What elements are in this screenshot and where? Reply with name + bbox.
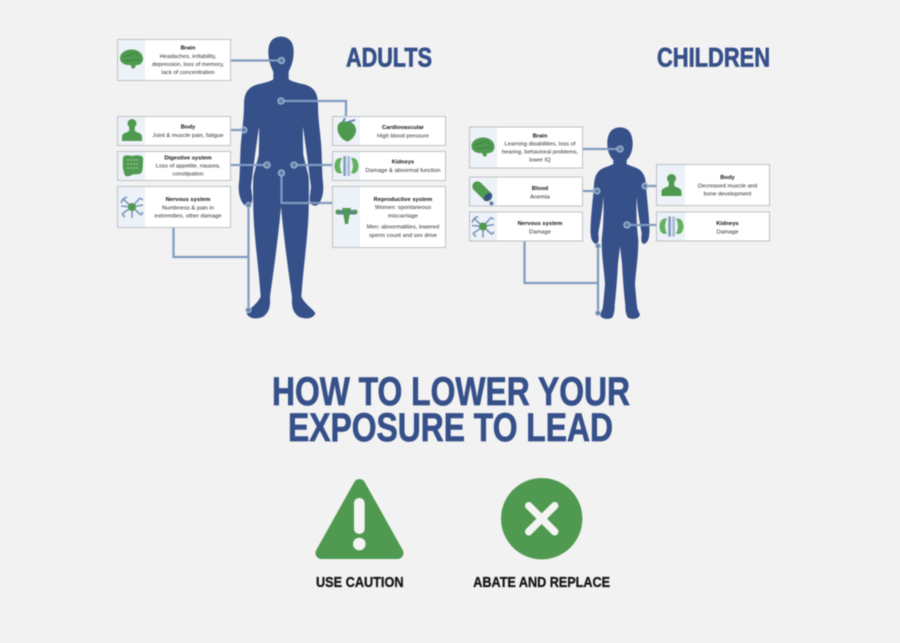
panel: adult reproductive system: [332, 186, 446, 248]
adult kidneys text: Kidneys: [392, 160, 414, 166]
child nervous text: Damage: [529, 230, 551, 236]
adults silhouette: [239, 37, 323, 318]
panel: adult brain: [118, 40, 230, 80]
adult brain text: lack of concentration: [161, 70, 215, 76]
adult kidneys text: [365, 160, 441, 174]
child body text: bone development: [704, 192, 752, 198]
heading: how to lower your exposure to lead: EXPOSURE TO LEAD: [288, 406, 613, 450]
adult nervous text: extremities, other damage: [154, 214, 222, 220]
icon: kidneys: [660, 216, 684, 236]
adult brain text: Brain: [181, 46, 196, 52]
child brain text: [502, 134, 579, 164]
adult digestive text: [156, 156, 221, 178]
panel: adult cardiovascular: [332, 116, 446, 146]
icon: blood vessel: [470, 179, 498, 207]
child body text: Decreased muscle and: [698, 184, 757, 190]
child kidneys text: Kidneys: [716, 221, 739, 227]
heading: children: CHILDREN: [657, 42, 770, 72]
child blood text: Blood: [532, 186, 549, 192]
icon: brain: [120, 50, 143, 68]
label: abate and replace: ABATE AND REPLACE: [473, 574, 610, 591]
adult body text: [153, 124, 223, 139]
adults connector lines: [174, 58, 346, 312]
panel: child body: [656, 164, 770, 206]
panel: adult kidneys: [332, 152, 446, 180]
adult digestive text: Digestive system: [164, 156, 212, 162]
panel: adult body: [118, 116, 230, 146]
label: use caution: USE CAUTION: [316, 574, 404, 591]
icon: brain: [472, 138, 494, 156]
adult kidneys text: Damage & abnormal function: [365, 168, 441, 174]
adult brain text: [152, 46, 224, 76]
icon: kidneys: [334, 156, 358, 176]
child blood text: [530, 186, 551, 200]
icon: reproductive organs: [336, 208, 358, 224]
child brain text: hearing, behavioral problems,: [502, 150, 579, 156]
heading: how to lower your exposure to lead: [272, 370, 630, 450]
panel: adult digestive system: [118, 152, 230, 180]
child body text: Body: [720, 175, 736, 181]
child nervous text: [518, 221, 562, 236]
icon: neuron: [472, 216, 494, 238]
children connector lines: [524, 146, 656, 315]
icon: intestines: [123, 155, 143, 176]
child brain text: lower IQ: [529, 158, 551, 164]
icon: neuron: [121, 197, 143, 218]
heading: how to lower your exposure to lead: HOW TO LOWER YOUR: [272, 370, 630, 414]
heading: adults: ADULTS: [346, 42, 432, 72]
panel: child brain: [470, 127, 582, 168]
panel: child nervous system: [470, 212, 582, 241]
adult cardiovascular text: [377, 125, 429, 140]
child brain text: Learning disabilities, loss of: [505, 142, 576, 148]
adult reproductive text: Women: spontaneous: [375, 205, 431, 211]
panel: child kidneys: [656, 212, 770, 241]
panel: adult nervous system: [118, 186, 230, 228]
icon: person: [122, 119, 142, 141]
child kidneys text: [716, 221, 739, 236]
panel: child blood: [470, 177, 582, 207]
adult reproductive text: miscarriage: [388, 214, 418, 220]
adult body text: Body: [181, 124, 196, 130]
icon: x in circle: [501, 478, 582, 559]
adult reproductive text: sperm count and sex drive: [369, 233, 437, 239]
icon: warning triangle: [322, 485, 398, 553]
adult reproductive text: Reproductive system: [374, 197, 432, 203]
adult nervous text: Nervous system: [166, 197, 210, 203]
adult body text: Joint & muscle pain, fatigue: [153, 133, 223, 139]
adult cardiovascular text: High blood pressure: [377, 134, 429, 140]
adult reproductive text: [367, 197, 439, 239]
child kidneys text: Damage: [717, 230, 738, 236]
adult nervous text: [154, 197, 222, 220]
adult digestive text: constipation: [173, 172, 203, 178]
adult nervous text: Numbness & pain in: [162, 206, 214, 212]
children silhouette: [591, 127, 649, 319]
adult reproductive text: Men: abnormalities, lowered: [367, 224, 439, 230]
icon: person: [662, 174, 682, 196]
adult digestive text: Loss of appetite, nausea,: [156, 164, 221, 170]
child body text: [698, 175, 757, 198]
child blood text: Anemia: [530, 194, 551, 200]
adult brain text: depression, loss of memory,: [152, 62, 224, 68]
child nervous text: Nervous system: [518, 221, 562, 227]
adult cardiovascular text: Cardiovascular: [382, 125, 425, 131]
adult brain text: Headaches, irritability,: [160, 54, 217, 60]
child brain text: Brain: [533, 134, 548, 140]
icon: heart: [337, 118, 356, 142]
